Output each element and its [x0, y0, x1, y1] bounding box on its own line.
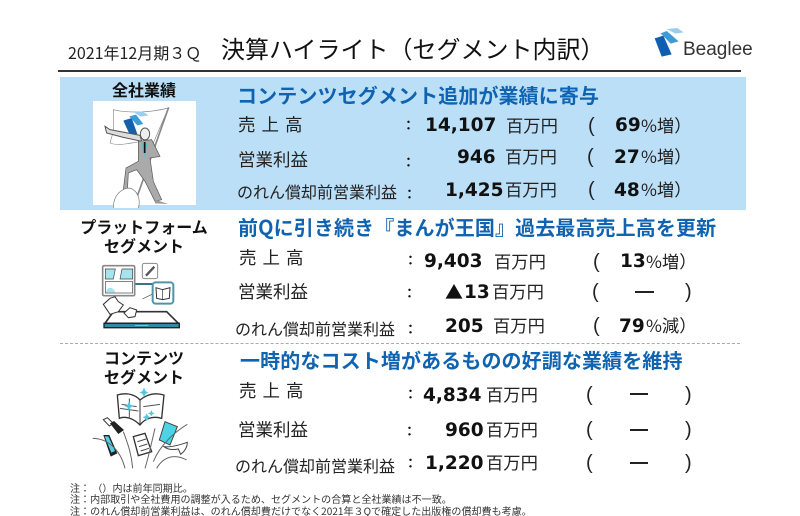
text: 売上高 — [238, 112, 308, 137]
subtitle: fiscal period: 2021年12月期３Ｑ — [68, 40, 201, 64]
text: ： — [402, 115, 415, 134]
footnotes: 注： （）内は前年同期比。 — [70, 480, 193, 495]
text: 百万円 — [486, 416, 538, 441]
text: 百万円 — [506, 112, 558, 137]
text: ： — [402, 152, 415, 171]
text: 売上高 — [239, 378, 310, 403]
panel: company-wide results — [60, 77, 746, 210]
text: %減） — [646, 312, 696, 337]
text: %増） — [646, 248, 696, 273]
text: ( — [586, 384, 593, 406]
footnotes: 注：内部取引や全社費用の調整が入るため、セグメントの合算と全社業績は不一致。 — [70, 491, 452, 506]
text: ： — [404, 250, 417, 269]
text: 960 — [445, 420, 484, 441]
text: ( — [593, 315, 600, 337]
text: 百万円 — [494, 248, 546, 273]
text: ) — [685, 419, 692, 441]
text: のれん償却前営業利益 — [235, 453, 395, 477]
row: company operating profit — [238, 143, 691, 172]
text: ) — [685, 384, 692, 406]
text: ( — [586, 419, 593, 441]
text: 営業利益 — [238, 417, 308, 442]
text: 13 — [620, 251, 646, 272]
row: platform profit before goodwill — [235, 312, 696, 340]
text: ) — [685, 281, 692, 303]
text: 205 — [445, 316, 484, 337]
text: のれん償却前営業利益 — [237, 179, 397, 203]
text: ( — [588, 179, 595, 201]
headline: company-wide: コンテンツセグメント追加が業績に寄与 — [237, 80, 599, 109]
text: %増） — [641, 143, 691, 168]
text: 14,107 — [425, 115, 496, 136]
row: content net sales — [239, 378, 692, 406]
text: ( — [588, 115, 595, 137]
text: ( — [592, 281, 599, 303]
text: ： — [403, 184, 416, 203]
row: platform operating profit — [238, 278, 692, 305]
text: %増） — [641, 112, 691, 137]
text: 48 — [614, 180, 640, 201]
footnotes — [70, 480, 532, 516]
text: 百万円 — [505, 143, 557, 168]
text: ： — [404, 453, 417, 472]
label: platform segment — [80, 214, 208, 257]
text: 27 — [614, 147, 640, 168]
text: ( — [586, 452, 593, 474]
text: ： — [403, 421, 416, 440]
text: のれん償却前営業利益 — [235, 316, 395, 340]
headline: platform: 前Qに引き続き『まんが王国』過去最高売上高を更新 — [238, 212, 716, 241]
text: ： — [403, 283, 416, 302]
text: 百万円 — [486, 449, 538, 474]
text: ( — [587, 146, 594, 168]
text: 売上高 — [239, 245, 310, 270]
text: 百万円 — [486, 381, 538, 406]
icon: Beaglee logo: Beaglee — [683, 39, 753, 60]
illustration: businessman with flag — [93, 101, 196, 205]
text: 79 — [619, 316, 645, 337]
text: ： — [404, 319, 417, 338]
headline: content: 一時的なコスト増があるものの好調な業績を維持 — [240, 345, 683, 374]
row: content operating profit — [238, 416, 692, 442]
label: content segment: セグメント — [104, 364, 184, 388]
illustration: open book and content items — [92, 388, 188, 469]
text: 69 — [615, 115, 641, 136]
text: 13 — [464, 282, 490, 303]
label: platform segment: プラットフォーム — [80, 214, 208, 238]
text: ： — [404, 384, 417, 403]
text: 4,834 — [423, 385, 482, 406]
text: 946 — [457, 147, 496, 168]
label: content segment — [104, 345, 184, 388]
text: 1,425 — [445, 180, 504, 201]
text: 1,220 — [425, 453, 484, 474]
title: 決算ハイライト（セグメント内訳） — [221, 30, 605, 65]
row: company profit before goodwill — [237, 176, 691, 203]
label: content segment: コンテンツ — [104, 345, 184, 369]
text: 9,403 — [424, 251, 483, 272]
text: ▲ — [445, 279, 463, 305]
text: 百万円 — [493, 312, 545, 337]
text: %増） — [641, 176, 691, 201]
text: ) — [685, 452, 692, 474]
icon: Beaglee logo — [654, 28, 753, 60]
text: 百万円 — [505, 176, 557, 201]
row: company net sales — [238, 112, 691, 137]
row: platform net sales — [239, 245, 696, 273]
illustration: tablet with comics — [102, 262, 180, 328]
label: company-wide: 全社業績 — [112, 77, 176, 101]
text: ( — [593, 251, 600, 273]
text: 営業利益 — [238, 147, 308, 172]
row: content profit before goodwill — [235, 449, 692, 477]
label: platform segment: セグメント — [104, 233, 184, 257]
text: 百万円 — [492, 278, 544, 303]
text: 営業利益 — [238, 279, 308, 304]
